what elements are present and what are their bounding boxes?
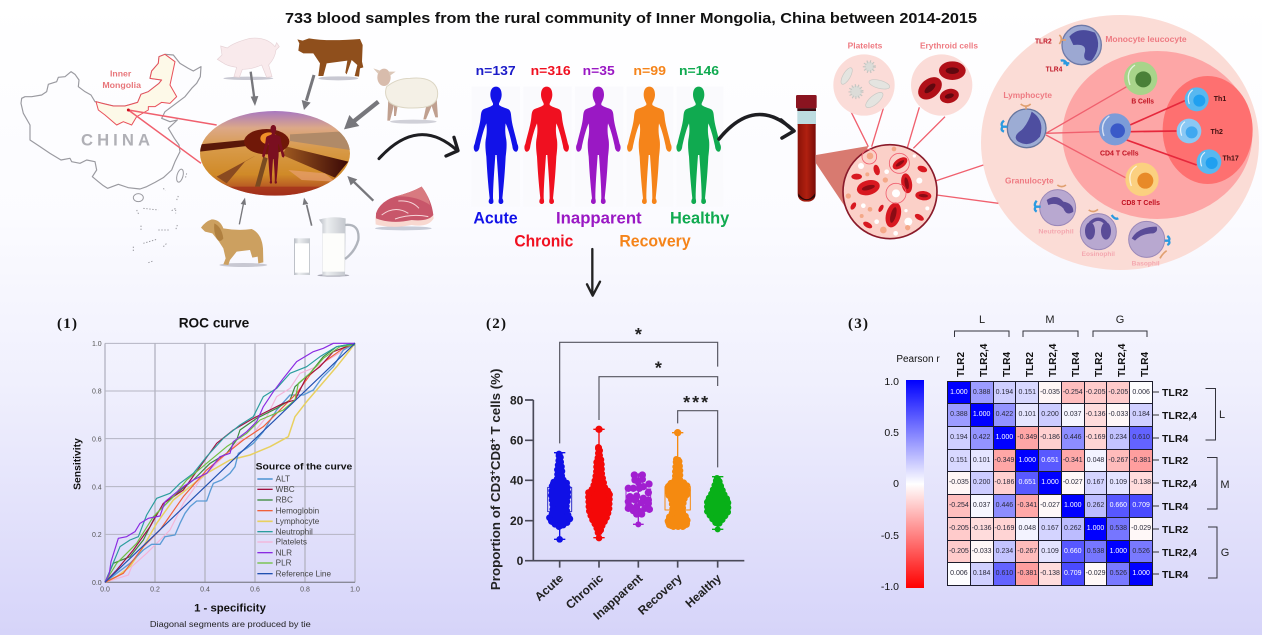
heatmap: Pearson correlation matrix: -0.027 — [1040, 502, 1060, 509]
series: Inapparent — [625, 471, 653, 527]
cell: eosinophil — [1080, 209, 1118, 250]
heatmap: Pearson correlation matrix: 0.167 — [1041, 525, 1059, 532]
heatmap: Pearson correlation matrix: 1.000 — [950, 388, 968, 396]
significance stars: * — [655, 357, 662, 377]
x tick labels: 0.0 — [100, 587, 110, 594]
heatmap: Pearson correlation matrix: -0.029 — [1131, 525, 1151, 532]
heatmap: Pearson correlation matrix: -0.349 — [994, 457, 1014, 464]
heatmap: Pearson correlation matrix: -0.267 — [1108, 457, 1128, 464]
arrow: to patient groups — [379, 135, 458, 159]
x tick labels: Inapparent — [590, 571, 645, 623]
label: Neutrophil: Neutrophil — [1038, 229, 1074, 236]
heatmap: Pearson correlation matrix: -0.186 — [994, 479, 1014, 486]
x tick labels: 0.4 — [200, 587, 210, 594]
legend: Pearson r colour bar: 1.0 — [884, 376, 899, 388]
icon: sheep — [373, 68, 438, 124]
label: Th2: Th2 — [1210, 129, 1223, 136]
series: Acute — [548, 453, 572, 543]
column labels: TLR2 — [1094, 352, 1105, 377]
row labels: TLR2 — [1162, 524, 1188, 536]
group: Acute: n=137 — [476, 63, 516, 78]
arrows: animals to human — [251, 72, 378, 129]
group: Chronic: Chronic — [514, 232, 573, 251]
label: Th17: Th17 — [1223, 156, 1239, 163]
axes — [525, 400, 744, 568]
label: Inner: Inner — [110, 68, 132, 78]
heatmap: Pearson correlation matrix: 0.167 — [1087, 479, 1104, 486]
heatmap: Pearson correlation matrix: -0.254 — [949, 502, 969, 509]
column labels: TLR2,4 — [1117, 343, 1128, 377]
label: Monocyte leucocyte: Monocyte leucocyte — [1105, 34, 1187, 44]
arrow: down to results — [587, 249, 600, 296]
cell: B cell — [1124, 62, 1157, 95]
x tick labels: Healthy — [682, 571, 724, 611]
heatmap: Pearson correlation matrix: 0.422 — [996, 411, 1013, 418]
icon: cow — [297, 38, 363, 80]
label: Granulocyte: Granulocyte — [1005, 175, 1054, 185]
heatmap: Pearson correlation matrix: -0.381 — [1017, 570, 1037, 577]
cell: Th17 — [1197, 149, 1221, 174]
series: Healthy — [707, 476, 728, 532]
heatmap: Pearson correlation matrix: -0.136 — [972, 525, 992, 532]
row labels: TLR4 — [1162, 569, 1188, 581]
label: CD8 T Cells: CD8 T Cells — [1121, 198, 1160, 207]
heatmap: Pearson correlation matrix: -0.205 — [1086, 388, 1105, 396]
heatmap: Pearson correlation matrix: -0.267 — [1017, 548, 1037, 555]
heatmap: Pearson correlation matrix: -0.138 — [1131, 479, 1151, 486]
group: Inapparent — [556, 63, 642, 227]
heatmap: Pearson correlation matrix: -0.035 — [1040, 388, 1060, 396]
row labels: TLR2 — [1162, 387, 1188, 399]
group brackets: rows: M — [1220, 479, 1230, 491]
panel: exposure sources and map — [21, 38, 458, 277]
legend: Pearson r colour bar: 0.5 — [884, 427, 899, 439]
heatmap: Pearson correlation matrix: 1.000 — [1132, 570, 1150, 577]
legend: Source of the curve — [256, 462, 352, 472]
curves — [105, 343, 355, 582]
x tick labels — [532, 571, 724, 623]
y tick labels — [510, 393, 524, 568]
footnote: Diagonal segments are produced by tie — [150, 619, 311, 629]
label: Basophil: Basophil — [1132, 261, 1160, 268]
icon: meat — [375, 187, 434, 230]
column labels: TLR2,4 — [979, 343, 990, 377]
heatmap: Pearson correlation matrix: -0.035 — [949, 479, 969, 486]
group brackets: columns: L — [979, 314, 985, 326]
central image: human in landscape — [200, 111, 350, 197]
heatmap: Pearson correlation matrix: 0.660 — [1064, 548, 1082, 555]
chart title: ROC curve — [179, 315, 250, 330]
y tick labels: 80 — [510, 393, 524, 407]
x tick labels — [100, 587, 360, 594]
heatmap: Pearson correlation matrix: 0.526 — [1110, 570, 1127, 577]
heatmap: Pearson correlation matrix: 0.037 — [973, 502, 990, 509]
y tick labels: 0.6 — [92, 436, 102, 443]
heatmap: Pearson correlation matrix: 0.709 — [1064, 570, 1082, 577]
heatmap: Pearson correlation matrix: -0.254 — [1063, 388, 1083, 396]
legend: Pearson r colour bar: -1.0 — [881, 581, 899, 593]
heatmap: Pearson correlation matrix: -0.205 — [1108, 388, 1128, 396]
chart: CD3+CD8+ T cell scatter — [487, 324, 744, 623]
row labels: TLR2,4 — [1162, 478, 1197, 490]
heatmap: Pearson correlation matrix: 0.109 — [1041, 548, 1059, 555]
group: Acute — [473, 63, 518, 227]
y tick labels: 0 — [517, 554, 524, 568]
label: CD4 T Cells: CD4 T Cells — [1100, 148, 1139, 157]
label: Th1: Th1 — [1214, 96, 1226, 103]
group brackets: columns: M — [1045, 314, 1055, 326]
heatmap: Pearson correlation matrix: -0.349 — [1017, 434, 1037, 441]
heatmap: Pearson correlation matrix: 0.709 — [1132, 502, 1150, 509]
x axis title: 1 - specificity — [194, 603, 267, 615]
heatmap: Pearson correlation matrix: 1.000 — [1064, 502, 1082, 509]
x tick labels: Chronic — [563, 571, 606, 612]
heatmap: Pearson correlation matrix: 0.200 — [1041, 411, 1059, 418]
column labels: TLR4 — [1002, 352, 1013, 377]
heatmap: Pearson correlation matrix: 0.006 — [1132, 388, 1150, 396]
big circle: leucocytes — [981, 15, 1259, 270]
x tick labels: Recovery — [635, 571, 685, 618]
y tick labels: 1.0 — [92, 341, 102, 348]
cell: neutrophil — [1035, 185, 1076, 226]
heatmap: Pearson correlation matrix: 0.151 — [950, 457, 968, 464]
heatmap: Pearson correlation matrix: -0.341 — [1017, 502, 1037, 509]
heatmap: Pearson correlation matrix: 0.184 — [1132, 411, 1150, 418]
connector lines — [127, 108, 217, 163]
grid — [105, 343, 355, 582]
icon: milk glass and jug — [294, 217, 358, 277]
label: Eosinophil: Eosinophil — [1082, 251, 1115, 258]
heatmap: Pearson correlation matrix: -0.205 — [949, 525, 969, 532]
x tick labels: 0.6 — [250, 587, 260, 594]
heatmap: Pearson correlation matrix: 0.194 — [996, 388, 1013, 396]
legend: Reference Line — [276, 569, 331, 578]
legend: ALT — [276, 475, 290, 484]
heatmap: Pearson correlation matrix: -0.341 — [1063, 457, 1083, 464]
icon: dog — [201, 219, 267, 267]
legend: Pearson r colour bar: 0 — [893, 478, 899, 490]
heatmap: Pearson correlation matrix: -0.033 — [972, 548, 992, 555]
figure backdrop — [472, 87, 723, 207]
heatmap: Pearson correlation matrix: 0.194 — [950, 434, 968, 441]
heatmap: Pearson correlation matrix: 0.388 — [973, 388, 990, 396]
heatmap: Pearson correlation matrix: 0.446 — [996, 502, 1013, 509]
series: Recovery — [665, 429, 690, 527]
column labels: TLR2 — [956, 352, 967, 377]
legend: PLR — [276, 559, 292, 568]
significance stars: *** — [683, 392, 710, 412]
legend: Pearson r colour bar — [881, 354, 940, 593]
legend: Neutrophil — [276, 527, 313, 536]
arrows: meat, milk and dog to human — [239, 176, 373, 226]
heatmap: Pearson correlation matrix: 1.000 — [1087, 525, 1104, 532]
heatmap: Pearson correlation matrix: 1.000 — [996, 434, 1013, 441]
significance stars: * — [635, 324, 642, 344]
heatmap: Pearson correlation matrix: 0.234 — [1110, 434, 1127, 441]
group: Recovery: n=99 — [633, 63, 666, 78]
y axis title: CD8 — [488, 443, 503, 470]
group: Recovery: Recovery — [619, 232, 691, 251]
label: CHINA: CHINA — [81, 131, 150, 150]
cell: lymphocyte — [1002, 104, 1046, 148]
row labels: TLR4 — [1162, 433, 1188, 445]
heatmap: Pearson correlation matrix: 1.000 — [1110, 548, 1127, 555]
group: Inapparent: Inapparent — [556, 208, 642, 227]
heatmap: Pearson correlation matrix: -0.033 — [1108, 411, 1128, 418]
heatmap: Pearson correlation matrix: 0.388 — [950, 411, 968, 418]
column labels: TLR4 — [1140, 352, 1151, 377]
heatmap: Pearson correlation matrix: -0.186 — [1040, 434, 1060, 441]
heatmap: Pearson correlation matrix: 0.101 — [973, 457, 990, 464]
zoom wedge — [816, 146, 868, 207]
label: Lymphocyte: Lymphocyte — [1003, 90, 1052, 100]
y tick labels: 0.2 — [92, 532, 102, 539]
legend: Pearson r colour bar: -0.5 — [881, 530, 899, 542]
heatmap: Pearson correlation matrix: -0.381 — [1131, 457, 1151, 464]
heatmap: Pearson correlation matrix: 1.000 — [1018, 457, 1036, 464]
series: Chronic — [588, 426, 610, 541]
x tick labels: 1.0 — [350, 587, 360, 594]
heatmap: Pearson correlation matrix: 0.651 — [1041, 457, 1059, 464]
blood smear circle — [843, 145, 937, 239]
group: Healthy: n=146 — [679, 63, 719, 78]
y axis title: T cells (%) — [488, 369, 503, 438]
heatmap: Pearson correlation matrix: -0.169 — [1086, 434, 1105, 441]
map group — [21, 54, 201, 263]
circle: platelets — [833, 54, 895, 116]
blood tube — [796, 95, 817, 202]
heatmap: Pearson correlation matrix: 0.526 — [1132, 548, 1150, 555]
icon: pig — [217, 38, 279, 80]
top sources group — [217, 38, 438, 129]
circle: erythroid cells — [911, 54, 972, 116]
group brackets: columns: G — [1116, 314, 1124, 326]
heatmap: Pearson correlation matrix: 0.660 — [1110, 502, 1127, 509]
y axis title: Proportion of CD3 — [488, 475, 503, 590]
circle: lymphocyte subsets — [1062, 51, 1252, 219]
legend — [256, 462, 352, 578]
heatmap: Pearson correlation matrix: 0.184 — [973, 570, 990, 577]
panel 3 number: (3) — [848, 316, 868, 332]
heatmap: Pearson correlation matrix: 0.200 — [973, 479, 990, 486]
heatmap: Pearson correlation matrix: 0.262 — [1087, 502, 1104, 509]
bottom sources group — [200, 111, 434, 277]
map of China — [21, 54, 201, 263]
connector lines — [851, 87, 1197, 203]
group: Chronic: n=316 — [531, 63, 571, 78]
y tick labels: 0.0 — [92, 580, 102, 587]
heatmap: Pearson correlation matrix: 0.101 — [1018, 411, 1036, 418]
heatmap: Pearson correlation matrix: -0.029 — [1086, 570, 1105, 577]
heatmap: Pearson correlation matrix: 0.422 — [973, 434, 990, 441]
heatmap: Pearson correlation matrix: -0.205 — [949, 548, 969, 555]
label: B Cells: B Cells — [1131, 97, 1154, 106]
column labels: TLR4 — [1071, 352, 1082, 377]
y tick labels: 0.8 — [92, 389, 102, 396]
significance stars — [635, 324, 710, 412]
cell: Th2 — [1177, 119, 1201, 143]
heatmap: Pearson correlation matrix: 1.000 — [973, 411, 990, 418]
group: Inapparent: n=35 — [583, 63, 615, 78]
heatmap: Pearson correlation matrix: 0.151 — [1018, 388, 1036, 396]
label: Mongolia: Mongolia — [102, 80, 141, 90]
cell: Th1 — [1185, 87, 1209, 111]
heatmap: Pearson correlation matrix: 0.538 — [1087, 548, 1104, 555]
heatmap: Pearson correlation matrix: 0.048 — [1087, 457, 1104, 464]
legend: Platelets — [276, 538, 307, 547]
cell: CD4 T cell — [1099, 113, 1131, 145]
panel: blood cell illustration — [796, 15, 1259, 270]
heatmap: Pearson correlation matrix: 0.048 — [1018, 525, 1036, 532]
label: TLR4: TLR4 — [1046, 67, 1062, 74]
arrow: to blood tube — [719, 114, 794, 139]
y tick labels: 0.4 — [92, 484, 102, 491]
legend: Lymphocyte — [276, 517, 320, 526]
y axis title: + — [487, 470, 497, 475]
label: Platelets: Platelets — [848, 41, 883, 51]
group brackets: columns — [954, 314, 1147, 337]
y axis title: + — [487, 438, 497, 443]
cell: CD8 T cell — [1125, 163, 1159, 196]
heatmap: Pearson correlation matrix: -0.027 — [1063, 479, 1083, 486]
x tick labels: 0.2 — [150, 587, 160, 594]
heatmap: Pearson correlation matrix: 0.610 — [996, 570, 1013, 577]
y tick labels — [92, 341, 102, 587]
row labels: TLR2,4 — [1162, 547, 1197, 559]
column labels: TLR2,4 — [1048, 343, 1059, 377]
panel 1 number: (1) — [57, 316, 77, 332]
legend: Pearson r colour bar: Pearson r — [896, 354, 940, 365]
group: Healthy — [670, 63, 730, 227]
legend: Hemoglobin — [276, 506, 319, 515]
group: Healthy: Healthy — [670, 208, 730, 227]
panel: patient groups — [472, 63, 730, 296]
heatmap: Pearson correlation matrix: 0.006 — [950, 570, 968, 577]
heatmap: Pearson correlation matrix: 0.262 — [1064, 525, 1082, 532]
group brackets: rows: L — [1219, 409, 1225, 421]
y tick labels: 60 — [510, 434, 524, 448]
legend: NLR — [276, 548, 292, 557]
column labels — [956, 343, 1151, 377]
panel 2 number: (2) — [486, 316, 506, 332]
heatmap: Pearson correlation matrix: -0.138 — [1040, 570, 1060, 577]
row labels: TLR4 — [1162, 501, 1188, 513]
y axis title: Sensitivity — [73, 438, 84, 490]
y tick labels: 20 — [510, 514, 524, 528]
cell: monocyte — [1059, 25, 1101, 66]
heatmap: Pearson correlation matrix: -0.136 — [1086, 411, 1105, 418]
heatmap: Pearson correlation matrix: 0.109 — [1110, 479, 1127, 486]
row labels: TLR2 — [1162, 455, 1188, 467]
chart: ROC curve — [73, 315, 360, 629]
heatmap: Pearson correlation matrix — [947, 380, 1153, 586]
row labels — [1153, 387, 1197, 581]
legend: RBC — [276, 496, 293, 505]
heatmap: Pearson correlation matrix: 0.446 — [1064, 434, 1082, 441]
heatmap: Pearson correlation matrix: 0.538 — [1110, 525, 1127, 532]
row labels: TLR2,4 — [1162, 410, 1197, 422]
legend: WBC — [276, 485, 295, 494]
heatmap: Pearson correlation matrix: 1.000 — [1041, 479, 1059, 486]
group: Acute: Acute — [473, 208, 518, 227]
x tick labels: Acute — [532, 571, 566, 604]
cell: basophil — [1129, 221, 1169, 258]
circle: T helper subsets — [1163, 76, 1253, 184]
heatmap: Pearson correlation matrix: 0.037 — [1064, 411, 1082, 418]
group: Chronic — [514, 63, 573, 251]
y tick labels: 40 — [510, 474, 524, 488]
heatmap: Pearson correlation matrix: 0.651 — [1018, 479, 1036, 486]
label: TLR2: TLR2 — [1035, 39, 1052, 46]
column labels: TLR2 — [1025, 352, 1036, 377]
group brackets: rows — [1206, 388, 1230, 578]
heatmap: Pearson correlation matrix: 0.610 — [1132, 434, 1150, 441]
heatmap: Pearson correlation matrix: 0.234 — [996, 548, 1013, 555]
significance brackets — [560, 342, 718, 467]
title: 733 blood samples from the rural community of Inner Mongolia, China between 2014-2015 — [285, 11, 977, 27]
group brackets: rows: G — [1221, 547, 1229, 559]
group: Recovery — [619, 63, 691, 251]
heatmap: Pearson correlation matrix: -0.169 — [994, 525, 1014, 532]
label: Erythroid cells: Erythroid cells — [920, 41, 978, 51]
x tick labels: 0.8 — [300, 587, 310, 594]
